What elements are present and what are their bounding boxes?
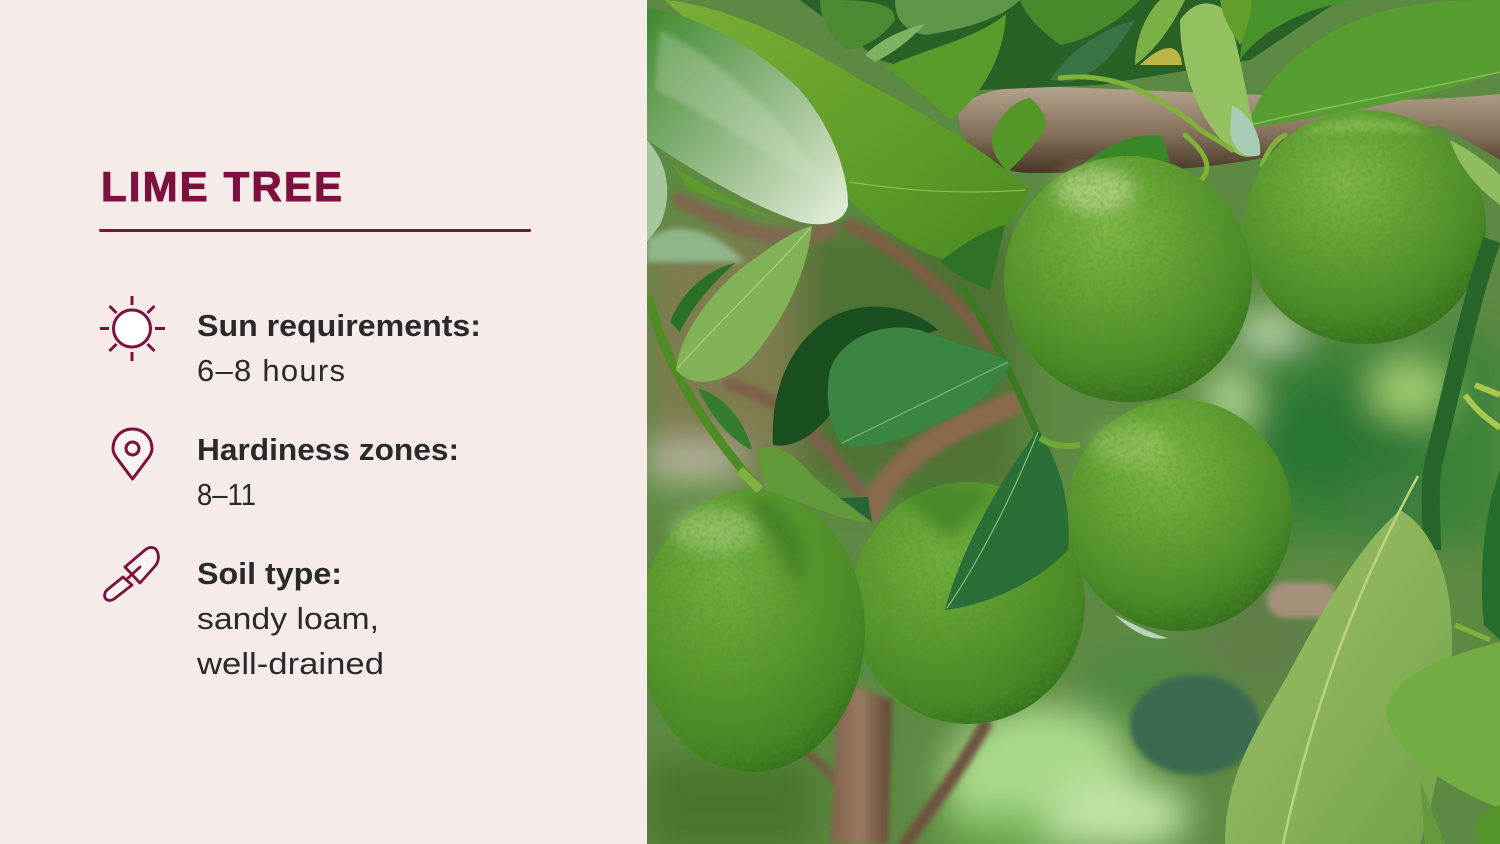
text block: sun requirements: Sun requirements: [197, 308, 481, 343]
photo: lime tree with green limes and leaves [639, 0, 1500, 844]
text block: hardiness zones: Hardiness zones: [197, 432, 459, 467]
icon: map pin [113, 429, 152, 479]
text block: soil type: sandy loam, [197, 601, 379, 636]
text block: soil type: Soil type: [197, 556, 342, 591]
lime peel texture [647, 110, 1500, 780]
text block: sun requirements [197, 308, 481, 388]
text block: hardiness zones: 8–11 [197, 477, 256, 512]
leaf: hanging pale top [1180, 3, 1260, 157]
leaf: large bottom right [1225, 510, 1452, 844]
trunk [830, 680, 892, 844]
icon: trowel [105, 547, 158, 600]
leaf: top centre [885, 14, 1006, 120]
leaves: centre group [773, 307, 938, 446]
leaf: right edge dark [1482, 470, 1500, 640]
text block: soil type: well-drained [196, 646, 384, 681]
thin stem to limes [960, 285, 1040, 440]
text block: hardiness zones [197, 432, 459, 512]
leaf: top right big [1248, 0, 1500, 128]
leaf: pale glossy upper left [647, 8, 848, 224]
text block: sun requirements: 6–8 hours [197, 353, 345, 388]
leaf: right edge upper [1450, 140, 1500, 205]
leaf: bottom right bright [1386, 642, 1500, 808]
leaf: small over branch [992, 98, 1046, 172]
background: left panel [0, 0, 647, 844]
title divider [99, 229, 531, 232]
title: LIME TREE [101, 163, 342, 210]
limes [1244, 110, 1486, 344]
stems centre [1040, 438, 1080, 446]
leaf: pale left edge [647, 140, 667, 242]
leaf: broad upper green [665, 0, 1030, 262]
branch [958, 87, 1500, 173]
stem: right vertical [1431, 240, 1492, 550]
blurred dark leaf [1130, 675, 1260, 775]
icon: sun [100, 296, 165, 361]
stems top [1060, 77, 1285, 185]
top dark foliage [800, 0, 1340, 90]
photo background bokeh [647, 230, 1500, 844]
text block: soil type [196, 556, 384, 681]
blurred branches [680, 200, 1320, 844]
